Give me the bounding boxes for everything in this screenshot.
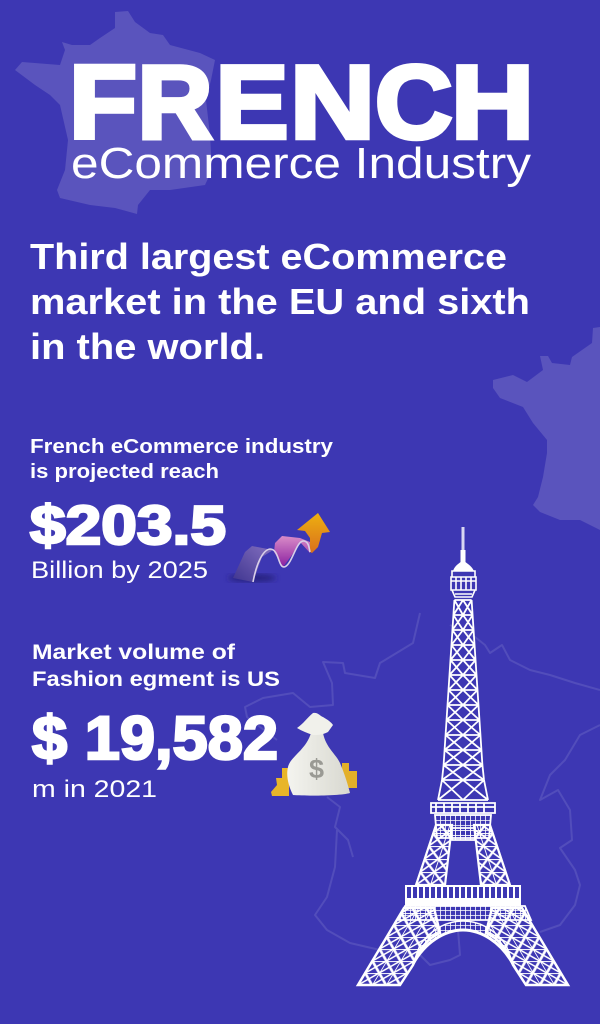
headline: in the world. bbox=[30, 326, 265, 367]
stat label: French eCommerce industry bbox=[30, 435, 334, 458]
centre dense band bbox=[452, 828, 475, 840]
France map silhouette behind title bbox=[15, 11, 215, 214]
stat label: Fashion egment is US bbox=[32, 668, 280, 691]
title word: FRENCH: H bbox=[451, 45, 534, 161]
left base leg bbox=[358, 908, 440, 985]
bag body bbox=[287, 733, 350, 796]
dollar sign: $ bbox=[309, 754, 324, 784]
France map outline behind the tower bbox=[245, 613, 600, 965]
antenna ball and spire bbox=[460, 550, 466, 564]
headline: Third largest eCommerce bbox=[30, 236, 507, 277]
icon: money bag with coins bbox=[271, 713, 357, 796]
lower shaft with dense band bbox=[435, 815, 491, 838]
stat note: Billion by 2025 bbox=[31, 557, 208, 584]
upper shaft lattice bbox=[438, 600, 488, 800]
headline: market in the EU and sixth bbox=[30, 281, 530, 322]
first platform bbox=[406, 886, 520, 899]
stat value: $ 19,582 bbox=[32, 704, 278, 772]
title word: FRENCH bbox=[69, 45, 534, 161]
first floor dense band bbox=[399, 906, 531, 920]
subtitle: eCommerce Industry: eCommerce Industry bbox=[71, 139, 531, 188]
right mid leg bbox=[474, 825, 510, 885]
antenna bbox=[462, 527, 464, 552]
stat: fashion segment bbox=[32, 641, 280, 803]
stat label bbox=[30, 435, 334, 483]
title word: FRENCH: F bbox=[69, 45, 137, 161]
arch bbox=[413, 930, 513, 964]
icon: rising ribbon arrow bbox=[228, 513, 330, 582]
left mid leg bbox=[416, 825, 452, 885]
coins left bbox=[271, 768, 289, 796]
title bbox=[69, 45, 534, 188]
bag neck bbox=[297, 713, 333, 735]
title word: FRENCH: N bbox=[290, 45, 375, 161]
observation cabin bbox=[451, 571, 476, 597]
stat label: Market volume of bbox=[32, 641, 236, 664]
title word: FRENCH: C bbox=[375, 45, 452, 161]
second platform bbox=[431, 803, 495, 813]
Eiffel tower bbox=[358, 527, 568, 985]
title word: FRENCH: E bbox=[216, 45, 288, 161]
platform solid deck bbox=[405, 899, 521, 906]
coins right bbox=[342, 763, 357, 788]
stat label bbox=[32, 641, 280, 691]
outer arch band bbox=[413, 921, 513, 964]
stat: projected reach bbox=[30, 435, 334, 584]
right base leg bbox=[486, 908, 568, 985]
stat label: is projected reach bbox=[30, 460, 219, 483]
stat note: m in 2021 bbox=[32, 776, 157, 803]
top dome bbox=[453, 560, 474, 571]
title word: FRENCH: R bbox=[138, 45, 212, 161]
headline bbox=[30, 236, 530, 367]
stat value: $203.5 bbox=[30, 494, 226, 556]
France map silhouette at right edge bbox=[493, 327, 600, 530]
